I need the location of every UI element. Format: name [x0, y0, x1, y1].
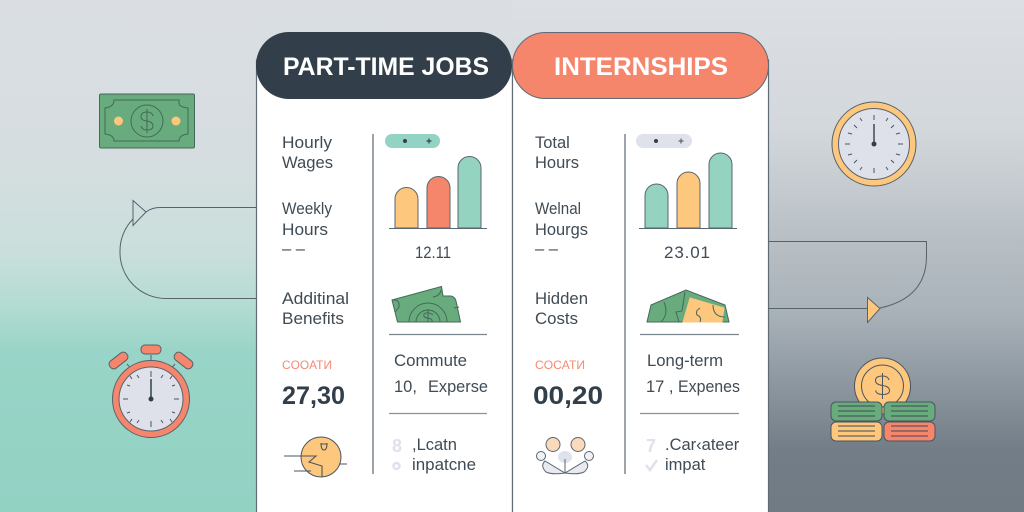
bar chart [639, 153, 737, 228]
panel: internships [512, 32, 768, 512]
row labels: hourly wages, weekly hours, benefits: Benefits [282, 310, 344, 328]
panel: part-time jobs [256, 32, 512, 512]
arrow: right loop [768, 242, 926, 322]
heading: internships: INTERNSHIPS [554, 53, 728, 81]
long-term expenses: Long-term [647, 352, 723, 370]
long-term expenses: Expenes [678, 378, 740, 396]
row labels: hourly wages, weekly hours, benefits: Hours [282, 221, 328, 239]
row labels: hourly wages, weekly hours, benefits: Hourly [282, 134, 333, 152]
commute expense [394, 352, 488, 396]
legend pill [385, 134, 440, 148]
row labels: total hours, weekly hours, hidden costs: Hidden [535, 290, 588, 308]
commute expense: 10, [394, 378, 417, 396]
career impact: 7 [646, 436, 656, 456]
bar chart [389, 156, 487, 228]
icon: people network [536, 438, 594, 474]
chart value: 23.01 [664, 243, 710, 262]
row labels: total hours, weekly hours, hidden costs: Hours [535, 154, 579, 172]
heading: part-time jobs [256, 32, 512, 99]
career impact: impat [665, 456, 706, 474]
long-term expenses [646, 352, 740, 396]
icon: dollar bill [100, 94, 194, 148]
location impact [392, 436, 476, 474]
row labels: total hours, weekly hours, hidden costs: – – [535, 240, 559, 258]
icon: cash [392, 286, 460, 322]
row labels: total hours, weekly hours, hidden costs: Costs [535, 310, 578, 328]
row labels: total hours, weekly hours, hidden costs: Total [535, 134, 570, 152]
long-term expenses: 17 , [646, 378, 674, 396]
icon: cash pile [647, 290, 729, 322]
legend pill [636, 134, 692, 148]
cost label and value: 00,20 [533, 382, 603, 410]
row labels: total hours, weekly hours, hidden costs: Hourgs [535, 221, 588, 239]
location impact: ,Lcatn [412, 436, 457, 454]
commute expense: Experse [428, 378, 488, 396]
row labels: hourly wages, weekly hours, benefits [282, 134, 349, 328]
icon: clock [832, 102, 916, 186]
heading: part-time jobs: PART-TIME JOBS [283, 53, 489, 81]
icon: orange circle with lines [284, 437, 347, 477]
row labels: hourly wages, weekly hours, benefits: Additinal [282, 290, 349, 308]
career impact [646, 436, 740, 474]
commute expense: Commute [394, 352, 467, 370]
heading: internships [512, 32, 768, 98]
row labels: hourly wages, weekly hours, benefits: Wages [282, 154, 333, 172]
chart value: 12.11 [415, 243, 451, 262]
icon: coin and bills [831, 358, 935, 441]
row labels: hourly wages, weekly hours, benefits: Weekly [282, 200, 333, 218]
location impact: inpatcne [412, 456, 476, 474]
location impact: 8 [392, 436, 402, 456]
icon: stopwatch [107, 345, 195, 438]
cost label and value: 27,30 [282, 382, 345, 410]
row labels: total hours, weekly hours, hidden costs [535, 134, 588, 328]
cost label and value [533, 358, 603, 410]
arrow: left loop [120, 200, 256, 298]
cost label and value: COCATИ [535, 358, 585, 372]
cost label and value: COOATИ [282, 358, 332, 372]
career impact: .Car‹ateer [665, 436, 740, 454]
row labels: hourly wages, weekly hours, benefits: – – [282, 240, 306, 258]
cost label and value [282, 358, 345, 410]
row labels: total hours, weekly hours, hidden costs: Welnal [535, 200, 581, 218]
